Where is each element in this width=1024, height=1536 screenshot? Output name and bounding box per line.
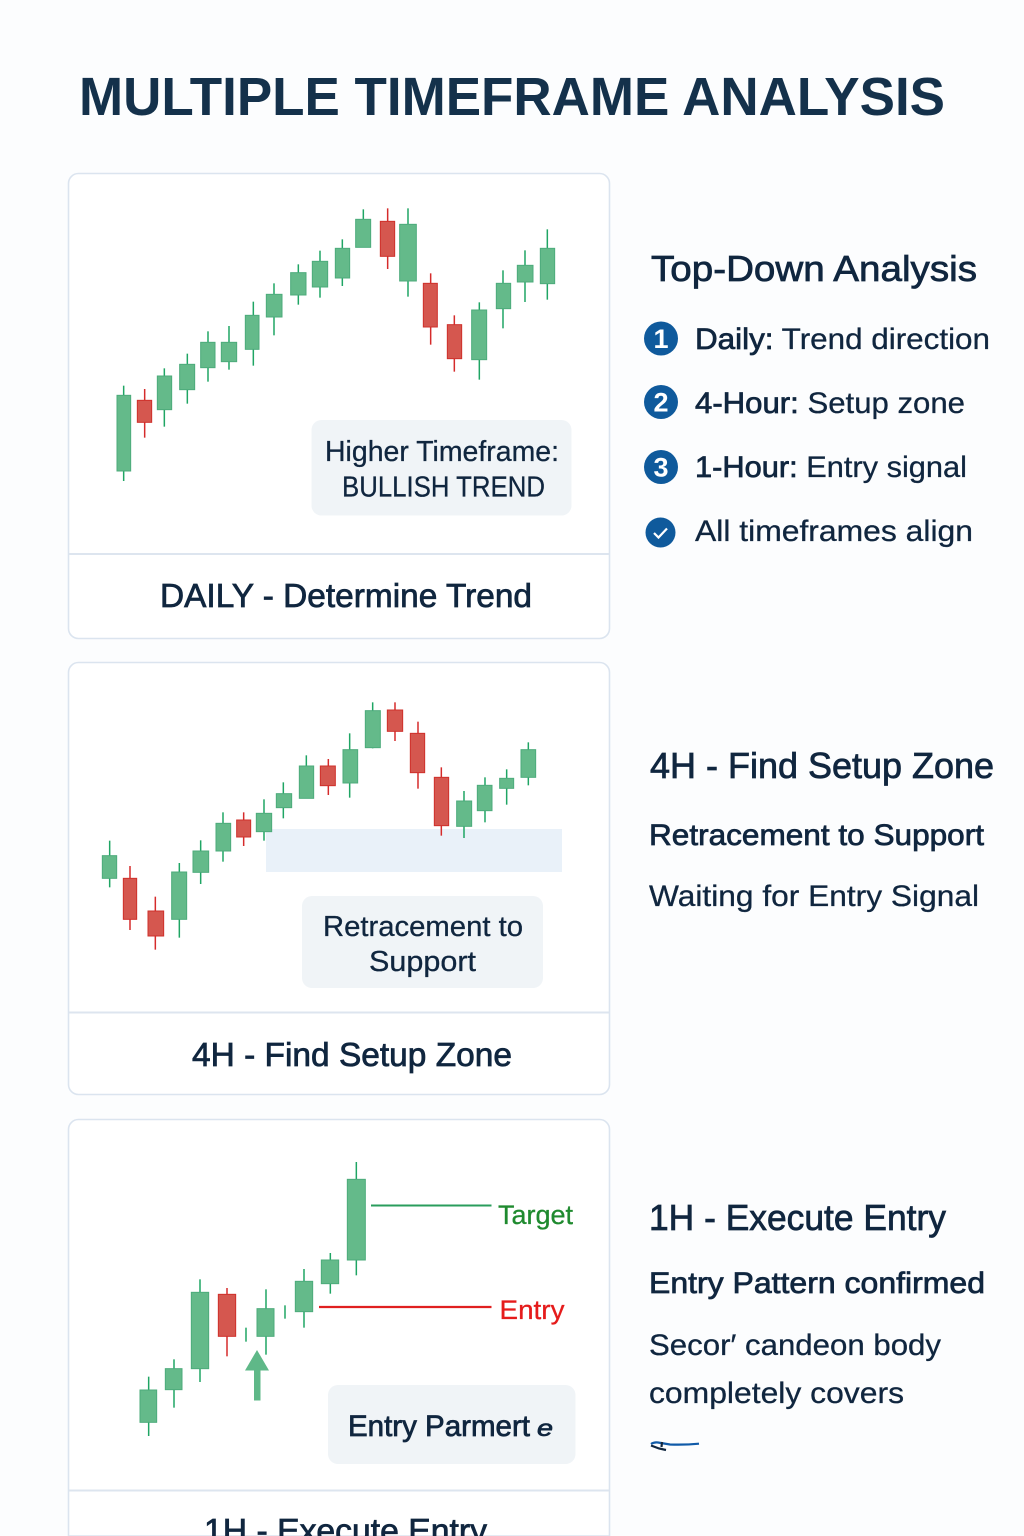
note: retracement: Retracement to Support (649, 819, 985, 852)
callout: higher timeframe (312, 420, 572, 516)
note: completely covers: completely covers (649, 1377, 904, 1410)
heading: 4H: 4H - Find Setup Zone (650, 745, 994, 786)
note: entry pattern: Entry Pattern confirmed (649, 1267, 985, 1300)
chart: daily candlesticks (117, 208, 555, 481)
callout: retracement: Support (369, 946, 476, 978)
step 3: 3 (653, 452, 669, 482)
title: MULTIPLE TIMEFRAME ANALYSIS (79, 67, 945, 127)
scribble mark (651, 1442, 699, 1450)
caption: 4H: 4H - Find Setup Zone (192, 1036, 512, 1073)
step 2: 2 (653, 388, 669, 418)
callout: entry pattern: Entry Parmert (348, 1410, 530, 1443)
step 1: 1 (653, 324, 669, 354)
target level: Target (498, 1200, 573, 1230)
entry level: Entry (500, 1295, 565, 1325)
support zone (266, 829, 562, 872)
step 3: 1-Hour: Entry signal (695, 451, 967, 484)
chart: 1H candlesticks (140, 1162, 365, 1436)
panel: 1H chart (68, 1120, 610, 1536)
callout: higher timeframe: BULLISH TREND (342, 472, 545, 504)
callout: entry pattern: e (537, 1415, 553, 1441)
panel: daily chart (68, 174, 610, 638)
caption: daily: DAILY - Determine Trend (160, 577, 532, 614)
side panel: top-down analysis (644, 248, 990, 548)
side panel: 4H notes (649, 745, 994, 913)
check: all timeframes align: All timeframes align (695, 515, 973, 548)
note: second candle: Secor′ candeon body (649, 1329, 941, 1362)
callout: retracement (302, 896, 543, 988)
note: waiting: Waiting for Entry Signal (649, 880, 979, 913)
side panel: 1H notes (649, 1197, 985, 1450)
chart: 4H candlesticks (102, 702, 536, 950)
panel: 4H chart (68, 662, 610, 1094)
callout: entry pattern (328, 1385, 576, 1464)
arrow: entry up arrow (245, 1350, 269, 1400)
heading: top-down analysis: Top-Down Analysis (651, 248, 977, 289)
step 1: Daily: Trend direction (695, 323, 990, 356)
heading: 1H: 1H - Execute Entry (649, 1197, 946, 1238)
step 2: 4-Hour: Setup zone (695, 387, 965, 420)
callout: retracement: Retracement to (323, 911, 523, 943)
callout: higher timeframe: Higher Timeframe: (325, 436, 559, 468)
